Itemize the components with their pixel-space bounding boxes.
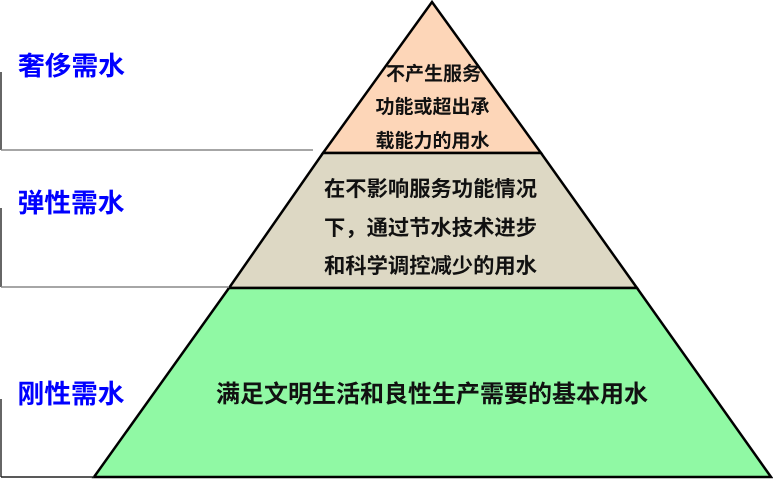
top tier text: 不产生服务 (386, 63, 481, 85)
pyramid tier: bottom (94, 288, 771, 477)
label: rigid water demand: 刚性需水 (18, 379, 125, 409)
label: elastic water demand: 弹性需水 (18, 188, 125, 218)
middle tier text (324, 178, 537, 278)
label: luxury water demand: 奢侈需水 (18, 51, 125, 81)
top tier text (376, 63, 490, 152)
bracket line: elastic (1, 208, 229, 287)
bracket line: luxury (1, 72, 313, 150)
pyramid tier: top (323, 2, 541, 153)
bracket line: rigid (1, 399, 94, 477)
top tier text: 功能或超出承 (376, 95, 490, 118)
middle tier text: 下，通过节水技术进步 (324, 217, 537, 240)
bottom tier text: 满足文明生活和良性生产需要的基本用水 (216, 380, 648, 408)
middle tier text: 在不影响服务功能情况 (324, 178, 537, 201)
top tier text: 载能力的用水 (376, 130, 490, 152)
pyramid tier: middle (229, 153, 637, 288)
middle tier text: 和科学调控减少的用水 (324, 254, 537, 278)
